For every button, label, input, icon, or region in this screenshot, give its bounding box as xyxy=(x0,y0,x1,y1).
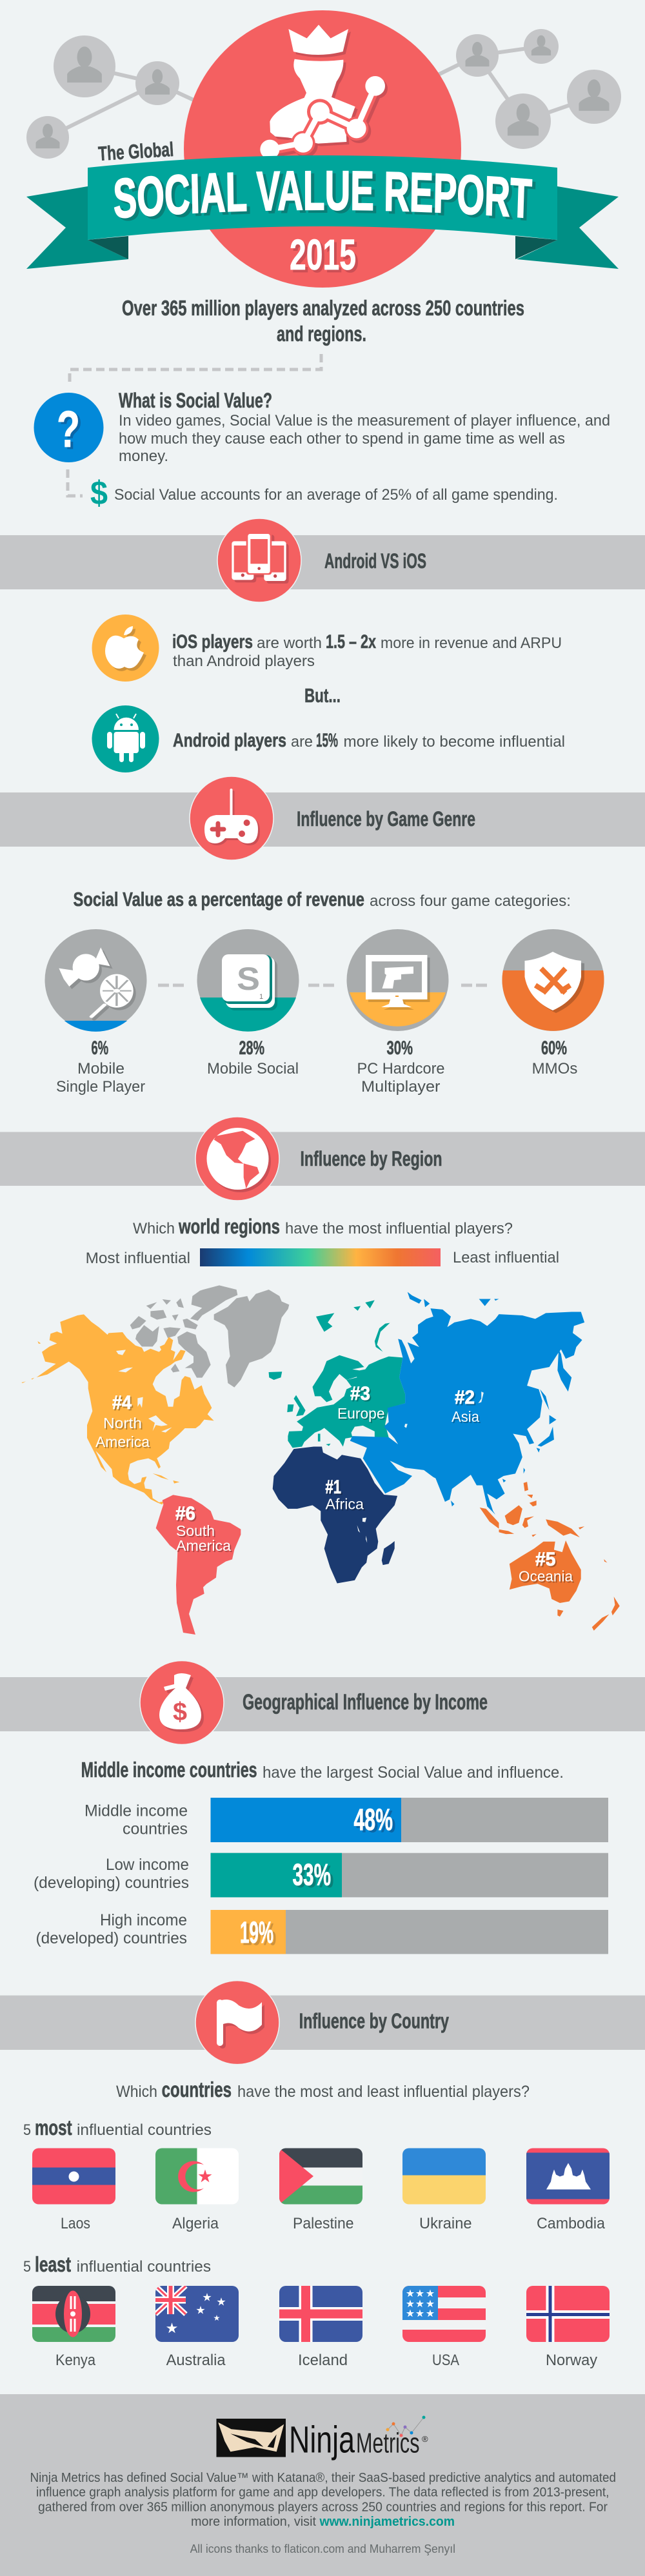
label: Single Player xyxy=(56,1078,145,1096)
bar: middle income: countries xyxy=(123,1820,188,1838)
map: south america xyxy=(156,1495,241,1635)
map: europe xyxy=(269,1300,405,1448)
bar: low income xyxy=(34,1853,608,1897)
section: game genre xyxy=(0,776,645,860)
income intro: have the largest Social Value and influence. xyxy=(263,1764,564,1782)
icon: question mark xyxy=(34,393,103,462)
section: income xyxy=(0,1661,645,1745)
map label: asia: Asia xyxy=(452,1408,479,1425)
heading: Influence by Game Genre xyxy=(297,807,475,831)
legend: Least influential xyxy=(453,1249,559,1266)
heading: Influence by Country xyxy=(299,2009,449,2032)
flag: ukraine: Ukraine xyxy=(419,2215,472,2232)
least influential heading: influential countries xyxy=(77,2258,211,2276)
label: Mobile Social xyxy=(207,1060,299,1077)
icon: apple xyxy=(92,615,159,682)
about text: www.ninjametrics.com xyxy=(319,2515,455,2529)
label: PC Hardcore xyxy=(357,1060,445,1077)
genre connectors xyxy=(158,984,487,987)
genre: mmos xyxy=(502,929,604,1077)
legend xyxy=(86,1248,559,1267)
flag: algeria: Algeria xyxy=(172,2215,219,2232)
flag: kenya xyxy=(32,2286,115,2369)
map label: south america: South xyxy=(176,1522,215,1539)
but: But... xyxy=(304,684,341,707)
map label: asia xyxy=(452,1387,479,1425)
heading: Influence by Region xyxy=(301,1147,442,1170)
about text: gathered from over 365 million anonymous players across 250 countries and regions for this report. For xyxy=(38,2501,608,2515)
intro text xyxy=(122,296,524,346)
country question xyxy=(116,2078,530,2101)
map: oceania xyxy=(480,1482,620,1631)
least influential heading: least xyxy=(35,2252,71,2276)
footer panel xyxy=(0,2394,645,2576)
icon: letter tile: S xyxy=(237,961,260,997)
map label: africa: #1 xyxy=(325,1477,341,1498)
map label: south america: America xyxy=(176,1537,231,1554)
ribbon xyxy=(88,155,557,240)
logo: ninja metrics: Metrics xyxy=(356,2427,419,2459)
about text: Ninja Metrics has defined Social Value™ with Katana®, their SaaS-based predictive analytics and automated xyxy=(30,2471,616,2485)
android text: are xyxy=(291,733,313,751)
about text xyxy=(30,2471,616,2529)
section: country xyxy=(0,1981,645,2065)
icon: letter tile: 1 xyxy=(259,993,263,1001)
region question: have the most influential players? xyxy=(285,1220,513,1237)
map label: oceania: #5 xyxy=(535,1549,556,1570)
country question: Which xyxy=(116,2083,157,2101)
flag: iceland: Iceland xyxy=(298,2352,348,2369)
ios text: more in revenue and ARPU xyxy=(381,634,562,652)
label: 60% xyxy=(541,1037,567,1059)
map label: europe: Europe xyxy=(337,1405,384,1422)
title: year: 2015 xyxy=(290,231,356,279)
most influential heading: most xyxy=(35,2116,72,2139)
most influential heading xyxy=(23,2116,212,2139)
label: 30% xyxy=(387,1037,413,1059)
flag: ukraine xyxy=(402,2148,486,2232)
intro text: and regions. xyxy=(277,322,366,346)
icon: question mark: ? xyxy=(57,400,80,458)
most influential heading: influential countries xyxy=(77,2121,212,2139)
map label: north america xyxy=(95,1392,150,1450)
heading: Android VS iOS xyxy=(324,549,426,573)
genre: pc hardcore multiplayer xyxy=(347,929,449,1096)
bar: middle income: Middle income xyxy=(84,1802,188,1820)
legend: Most influential xyxy=(86,1250,190,1267)
least influential heading: 5 xyxy=(23,2258,31,2276)
section: region xyxy=(0,1117,645,1201)
flag: norway: Norway xyxy=(546,2352,597,2369)
bar: low income: (developing) countries xyxy=(34,1874,189,1892)
genre intro: Social Value as a percentage of revenue xyxy=(74,888,364,910)
flag: norway xyxy=(526,2286,610,2369)
title: Social Value Report: SOCIAL VALUE REPORT xyxy=(114,170,535,221)
icon: flag xyxy=(217,2000,262,2046)
logo: ninja metrics: ® xyxy=(422,2434,428,2444)
region question xyxy=(133,1215,513,1238)
most influential heading: 5 xyxy=(23,2121,31,2139)
android text: more likely to become influential xyxy=(343,733,565,751)
social network nodes xyxy=(26,29,621,159)
map label: europe: #3 xyxy=(350,1383,370,1404)
title: The Global: The Global xyxy=(97,138,174,165)
flag: australia: Australia xyxy=(166,2352,226,2369)
icon: shield with swords xyxy=(525,952,581,1010)
what is social value: money. xyxy=(119,447,168,465)
bar: middle income xyxy=(84,1798,608,1842)
icon: dollar: $ xyxy=(90,475,108,512)
icon: monitor and gun xyxy=(366,955,427,1007)
flag: iceland xyxy=(279,2286,362,2369)
genre intro: across four game categories: xyxy=(370,892,571,910)
world map xyxy=(21,1285,620,1635)
icon: globe xyxy=(206,1128,271,1192)
social value share: Social Value accounts for an average of 25% of all game spending. xyxy=(114,486,558,504)
label: 28% xyxy=(239,1037,264,1059)
logo: ninja metrics: Ninja xyxy=(289,2419,355,2461)
map label: africa: Africa xyxy=(325,1496,364,1513)
label xyxy=(357,1037,445,1096)
map label: north america: North xyxy=(103,1415,142,1431)
icon: letter tile xyxy=(222,954,275,1008)
region question: world regions xyxy=(178,1215,280,1238)
map label: south america: #6 xyxy=(175,1503,195,1524)
map: arctic and greenland xyxy=(130,1285,289,1388)
bar: high income: 19% xyxy=(240,1915,273,1949)
income intro xyxy=(81,1758,564,1782)
label: MMOs xyxy=(532,1060,577,1077)
about text: more information, visit xyxy=(191,2515,316,2529)
label xyxy=(56,1037,145,1096)
bar: low income: 33% xyxy=(293,1858,331,1892)
label xyxy=(207,1037,299,1077)
genre: mobile single player xyxy=(45,929,147,1096)
label xyxy=(532,1037,577,1077)
flag: algeria xyxy=(155,2148,239,2232)
logo: ninja metrics xyxy=(217,2415,428,2461)
flag: usa: USA xyxy=(432,2352,459,2369)
icon: gamepad xyxy=(204,789,258,843)
what is social value: how much they cause each other to spend in game time as well as xyxy=(119,430,565,447)
ios text: 1.5 – 2x xyxy=(326,631,376,653)
icon: money bag xyxy=(159,1673,201,1729)
flag: cambodia xyxy=(526,2148,610,2232)
android text xyxy=(173,730,565,751)
map label: europe xyxy=(337,1383,384,1422)
label: Mobile xyxy=(77,1060,124,1077)
ios text: are worth xyxy=(257,634,322,652)
flag: palestine: Palestine xyxy=(293,2215,353,2232)
map label: oceania: Oceania xyxy=(519,1568,573,1585)
hero circle xyxy=(184,10,461,288)
credit: All icons thanks to flaticon.com and Muharrem Şenyıl xyxy=(190,2542,455,2555)
least influential heading xyxy=(23,2252,211,2276)
icon: crowned player with chart xyxy=(260,25,385,159)
flag: australia xyxy=(155,2286,239,2369)
what is social value: What is Social Value? xyxy=(119,389,272,412)
label: 6% xyxy=(92,1037,108,1059)
bar: high income xyxy=(36,1910,608,1954)
icon: android xyxy=(92,705,159,772)
map label: south america xyxy=(175,1503,231,1554)
region question: Which xyxy=(133,1220,175,1237)
icon: candy xyxy=(59,947,134,1017)
what is social value: In video games, Social Value is the measurement of player influence, and xyxy=(119,412,610,429)
bar: high income: High income xyxy=(100,1911,187,1929)
flag: palestine xyxy=(279,2148,362,2232)
flag: cambodia: Cambodia xyxy=(537,2215,606,2232)
flag: kenya: Kenya xyxy=(55,2352,96,2369)
map label: asia: #2 xyxy=(455,1387,475,1408)
heading: Geographical Influence by Income xyxy=(243,1690,488,1715)
icon: phones xyxy=(232,532,286,581)
flag: usa xyxy=(402,2286,486,2369)
bar: low income: Low income xyxy=(106,1856,189,1874)
label: Multiplayer xyxy=(361,1078,440,1096)
icon: money bag: $ xyxy=(173,1698,187,1726)
income intro: Middle income countries xyxy=(81,1758,257,1782)
section: android vs ios xyxy=(0,518,645,602)
about text: influence graph analysis platform for game and app developers. The data reflected is from 2013-present, xyxy=(36,2486,609,2500)
ribbon tails xyxy=(26,186,619,269)
map label: north america: #4 xyxy=(112,1392,132,1413)
bar: high income: (developed) countries xyxy=(36,1929,187,1947)
ios text: than Android players xyxy=(173,653,315,670)
android text: Android players xyxy=(173,730,286,751)
map label: north america: America xyxy=(95,1433,150,1450)
map: africa xyxy=(273,1447,397,1583)
map: north america xyxy=(21,1314,214,1504)
map: asia xyxy=(350,1292,584,1515)
ios text: iOS players xyxy=(172,631,253,653)
country question: have the most and least influential players? xyxy=(237,2083,530,2101)
flag: laos xyxy=(32,2148,115,2232)
what is social value xyxy=(119,389,610,465)
map label: oceania xyxy=(519,1549,573,1585)
android text: 15% xyxy=(316,730,338,751)
ios text xyxy=(172,631,562,670)
country question: countries xyxy=(162,2078,232,2101)
map label: africa xyxy=(325,1477,364,1513)
flag: laos: Laos xyxy=(61,2215,90,2232)
genre: mobile social xyxy=(197,929,299,1077)
bar: middle income: 48% xyxy=(353,1802,393,1836)
